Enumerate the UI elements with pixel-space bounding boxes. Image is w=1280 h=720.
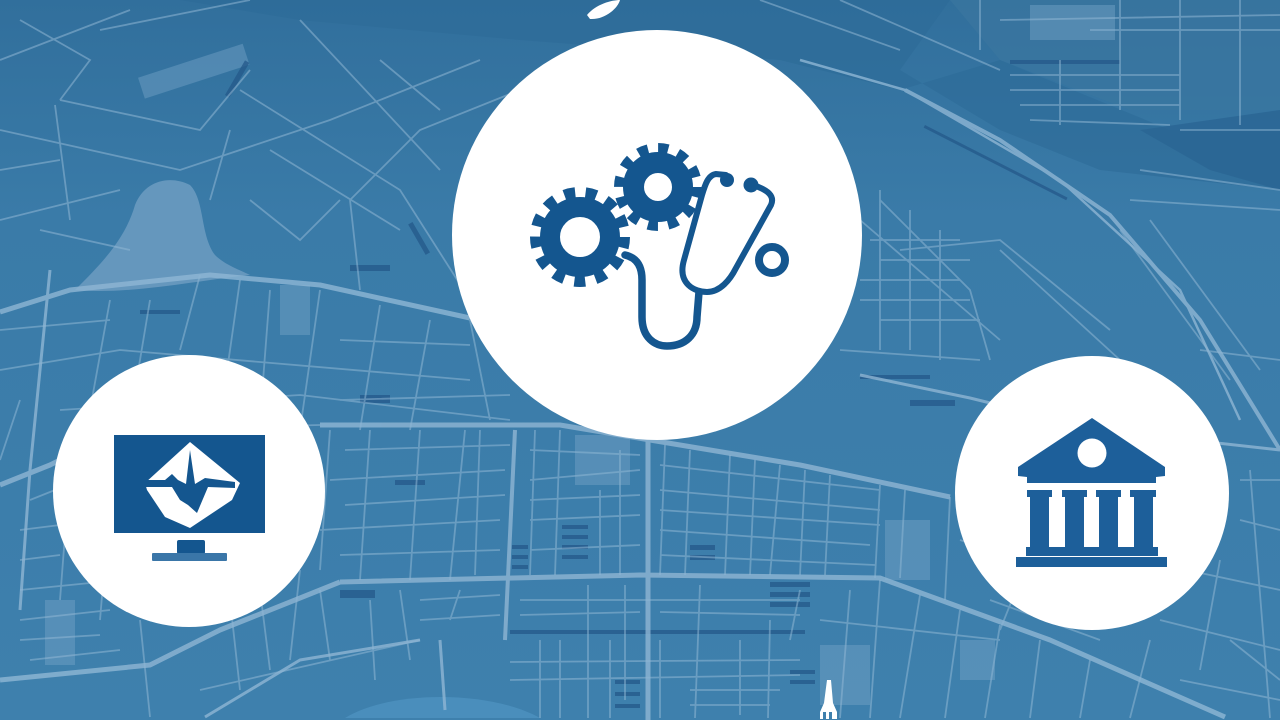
panel: right circle with institution <box>955 356 1229 630</box>
icon: classical building <box>1016 418 1167 567</box>
icon: stethoscope <box>625 173 785 346</box>
river bands <box>180 0 1280 190</box>
lake <box>75 180 250 291</box>
panel: left circle with monitor <box>53 355 325 627</box>
dark blocks <box>140 60 1120 708</box>
icon: monitor with heartbeat <box>114 435 265 561</box>
icon: white tower at bottom <box>820 680 837 719</box>
icon: large gear <box>536 192 624 282</box>
panel: central circle with gears and stethoscope <box>452 30 862 440</box>
bottom water <box>345 697 540 718</box>
clipped title glyph <box>587 0 620 19</box>
icon: small gear <box>619 148 697 226</box>
